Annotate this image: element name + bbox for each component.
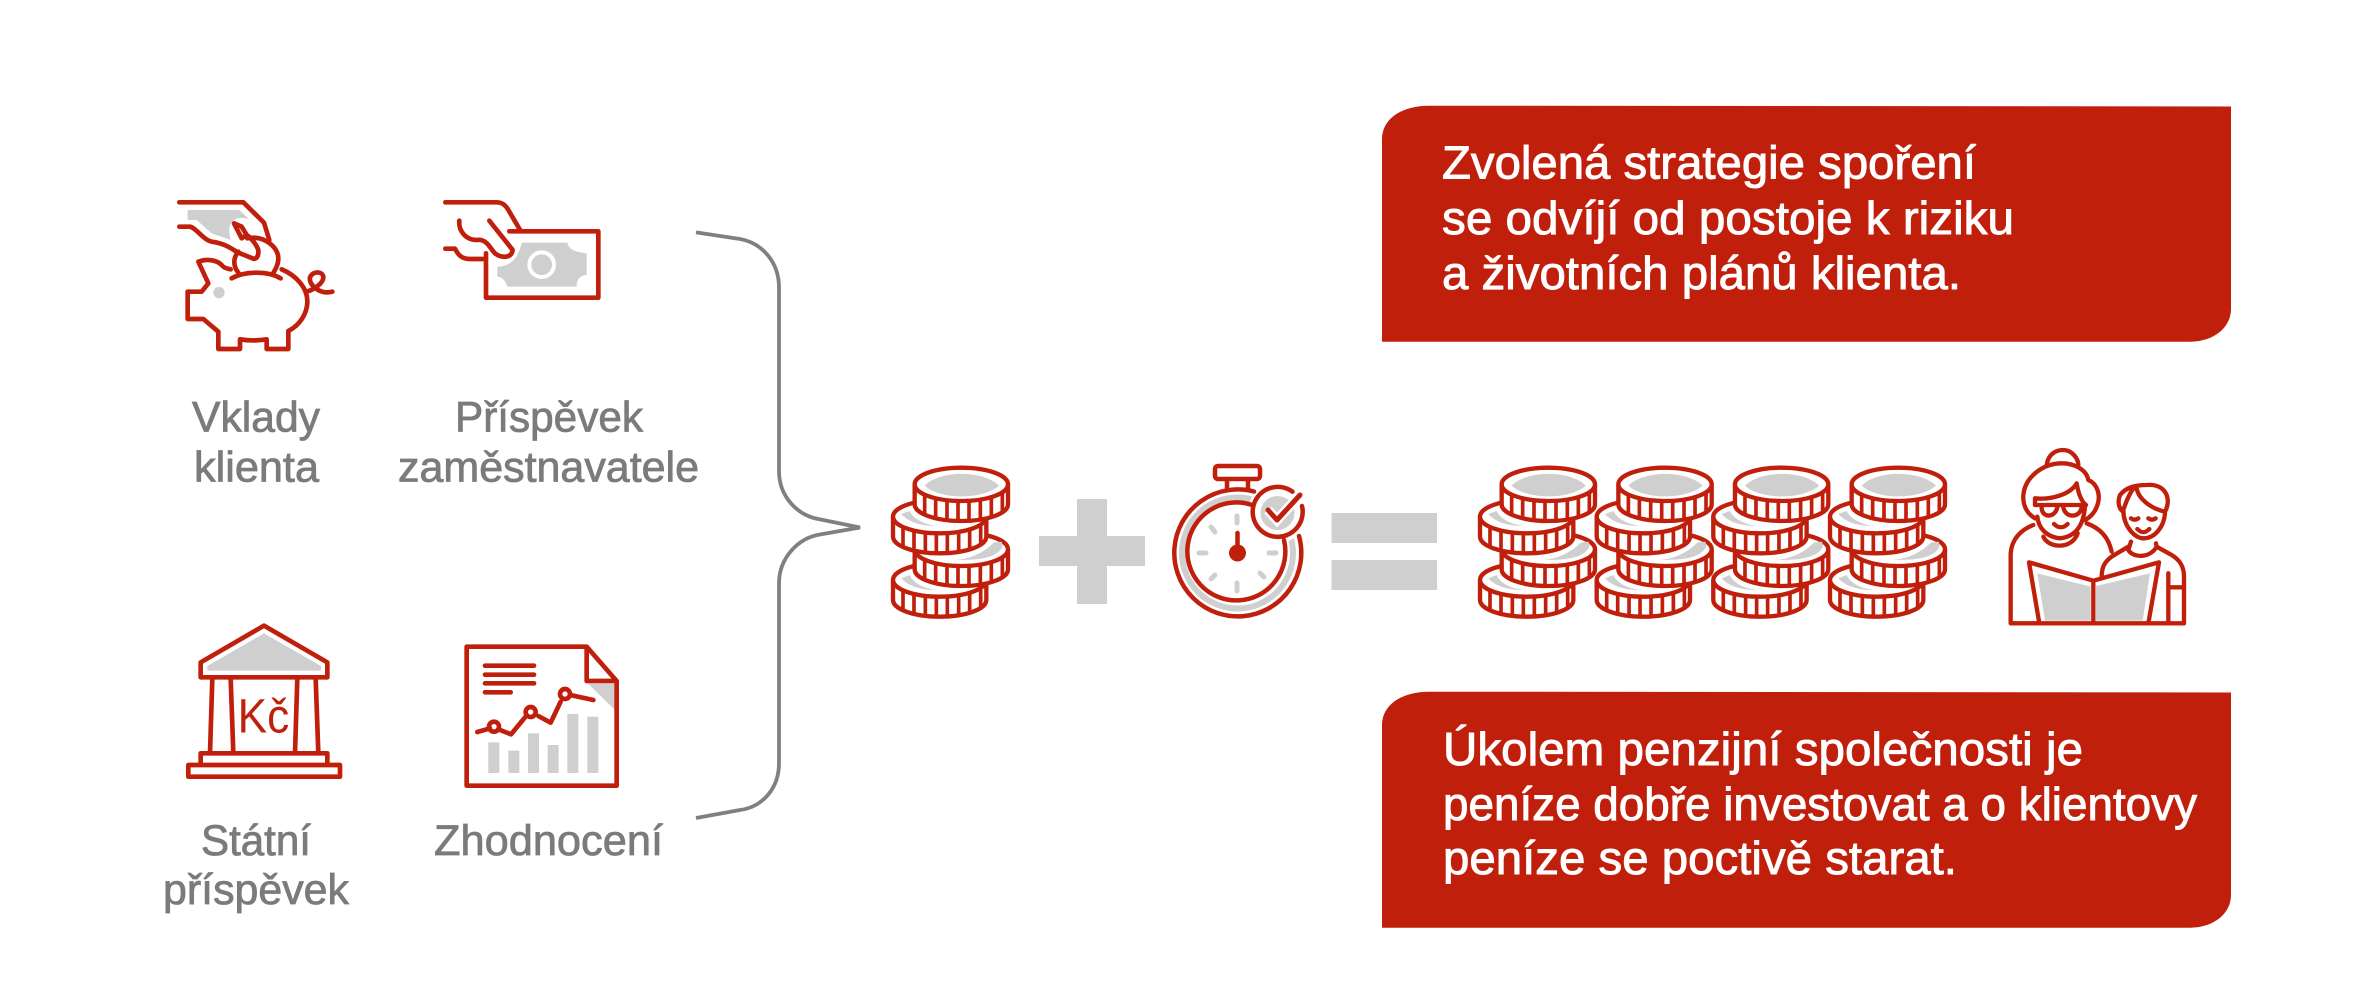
icon: grandmother and child reading a book [2011,450,2184,623]
label: Příspěvek zaměstnavatele: zaměstnavatele [398,444,699,492]
icon: coin stack 3 [1713,468,1828,617]
icon: hand with banknote [445,202,598,298]
icon: coin stack (savings) [893,468,1008,617]
callout text [1442,136,2014,299]
label: Vklady klienta [192,394,320,492]
icon: stopwatch with check mark [1174,466,1308,616]
label: Vklady klienta: klienta [194,444,319,492]
brace [696,232,860,818]
label: Příspěvek zaměstnavatele [398,394,699,492]
callout text: Zvolená strategie spoření [1442,136,1976,188]
label: Zhodnocení: Zhodnocení [434,817,663,865]
icon: coin stack 2 [1597,468,1712,617]
panel: pension company callout [1382,692,2231,928]
panel: strategy callout [1382,106,2231,342]
callout text: Úkolem penzijní společnosti je [1443,723,2083,775]
icon: coin stack 1 [1480,468,1595,617]
icon: state bank building [188,626,340,777]
plus sign [1039,499,1145,604]
label: Státní příspěvek [163,817,349,914]
label: Vklady klienta: Vklady [192,394,320,442]
icon: coin stack 4 [1830,468,1945,617]
icon: state bank building: Kč [238,691,289,744]
label: Příspěvek zaměstnavatele: Příspěvek [455,394,643,442]
icon: piggy bank with hand [179,202,332,349]
callout text: peníze se poctivě starat. [1443,832,1957,884]
equals sign [1332,513,1437,590]
icon: document with chart [467,647,617,786]
label: Státní příspěvek: Státní [201,817,311,865]
label: Státní příspěvek: příspěvek [163,866,349,914]
callout text: a životních plánů klienta. [1442,247,1961,299]
callout text: peníze dobře investovat a o klientovy [1443,778,2197,830]
callout text [1443,723,2197,884]
callout text: se odvíjí od postoje k riziku [1442,192,2014,244]
